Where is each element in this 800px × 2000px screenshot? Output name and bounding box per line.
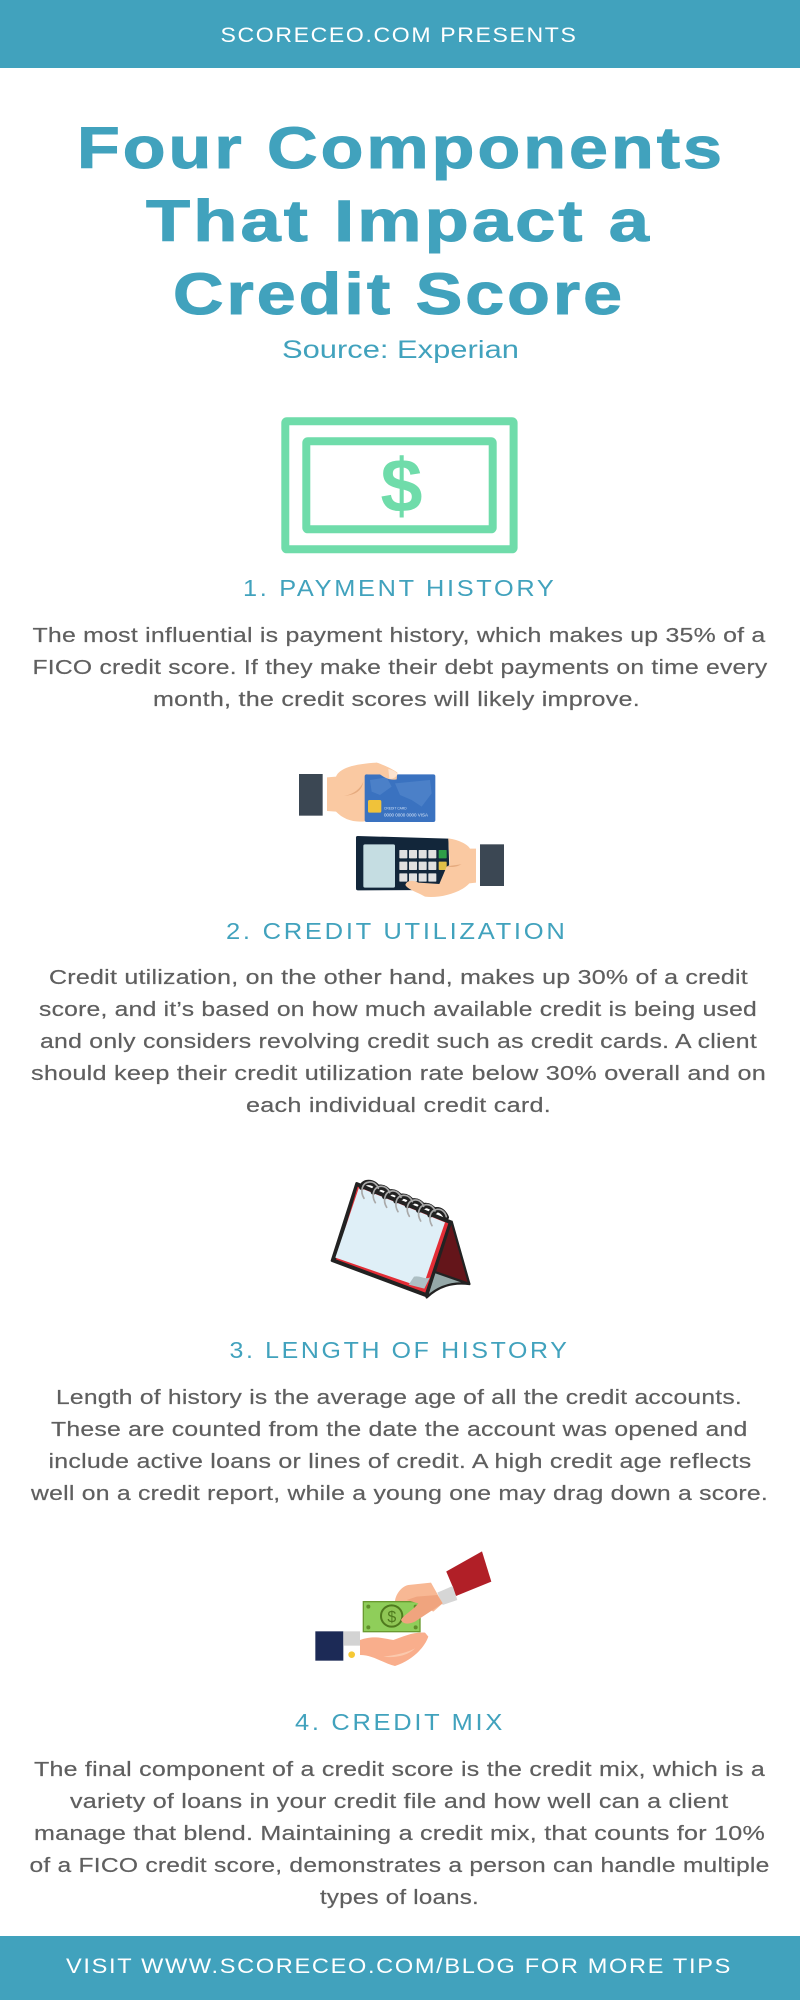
top banner xyxy=(0,0,800,68)
text: length of history description: Length of history is the average age of all the credit accounts. xyxy=(56,1386,742,1409)
text: length of history description: well on a credit report, while a young one may drag down a score. xyxy=(30,1482,768,1505)
panel: credit mix xyxy=(30,1551,770,1909)
text: credit mix description: The final component of a credit score is the credit mix, which is a xyxy=(34,1758,765,1781)
icon: dollar bill xyxy=(285,421,514,549)
text: credit utilization description: score, and it’s based on how much available credit is being used xyxy=(39,998,757,1021)
heading: credit mix: 4. CREDIT MIX xyxy=(295,1709,505,1735)
icon: desk calendar xyxy=(332,1182,469,1297)
icon: hands exchanging money: $ xyxy=(387,1609,396,1626)
text: payment history description xyxy=(32,624,768,711)
heading: payment history: 1. PAYMENT HISTORY xyxy=(243,575,556,601)
title: That Impact a xyxy=(146,189,652,254)
icon: card and payment terminal: CREDIT CARD xyxy=(384,806,407,810)
text: credit utilization description: and only considers revolving credit such as credit cards. A client xyxy=(40,1030,757,1053)
title: Four Components xyxy=(77,116,725,181)
text: credit utilization description: Credit utilization, on the other hand, makes up 30% of a credit xyxy=(49,966,748,989)
footer banner: VISIT WWW.SCORECEO.COM/BLOG FOR MORE TIPS xyxy=(66,1955,732,1978)
source line: Source: Experian xyxy=(282,336,519,364)
title xyxy=(77,116,725,327)
icon: card and payment terminal xyxy=(299,763,504,897)
text: length of history description xyxy=(30,1386,768,1505)
top banner: SCORECEO.COM PRESENTS xyxy=(220,24,578,47)
text: credit mix description: types of loans. xyxy=(320,1886,479,1909)
text: credit mix description: manage that blend. Maintaining a credit mix, that counts for 10% xyxy=(34,1822,765,1845)
text: payment history description: FICO credit score. If they make their debt payments on time every xyxy=(32,656,768,679)
text: payment history description: month, the credit scores will likely improve. xyxy=(153,688,640,711)
icon: dollar bill: $ xyxy=(380,444,422,529)
heading: credit utilization: 2. CREDIT UTILIZATION xyxy=(226,918,568,944)
heading: length of history: 3. LENGTH OF HISTORY xyxy=(230,1337,570,1363)
panel: payment history xyxy=(32,421,768,711)
text: credit utilization description: each individual credit card. xyxy=(246,1094,551,1117)
icon: card and payment terminal: 0000 0000 0000 VISA xyxy=(384,812,429,817)
text: credit mix description: of a FICO credit score, demonstrates a person can handle multiple xyxy=(30,1854,770,1877)
panel: length of history xyxy=(30,1182,768,1505)
text: credit utilization description xyxy=(31,966,766,1117)
text: credit utilization description: should keep their credit utilization rate below 30% overall and on xyxy=(31,1062,766,1085)
footer banner xyxy=(0,1936,800,2000)
text: credit mix description: variety of loans in your credit file and how well can a client xyxy=(70,1790,729,1813)
title: Credit Score xyxy=(173,262,625,327)
text: payment history description: The most influential is payment history, which makes up 35% of a xyxy=(32,624,766,647)
text: credit mix description xyxy=(30,1758,770,1909)
icon: hands exchanging money xyxy=(315,1551,491,1666)
panel: credit utilization xyxy=(31,763,766,1117)
text: length of history description: These are counted from the date the account was opened and xyxy=(51,1418,748,1441)
text: length of history description: include active loans or lines of credit. A high credit age reflects xyxy=(48,1450,751,1473)
